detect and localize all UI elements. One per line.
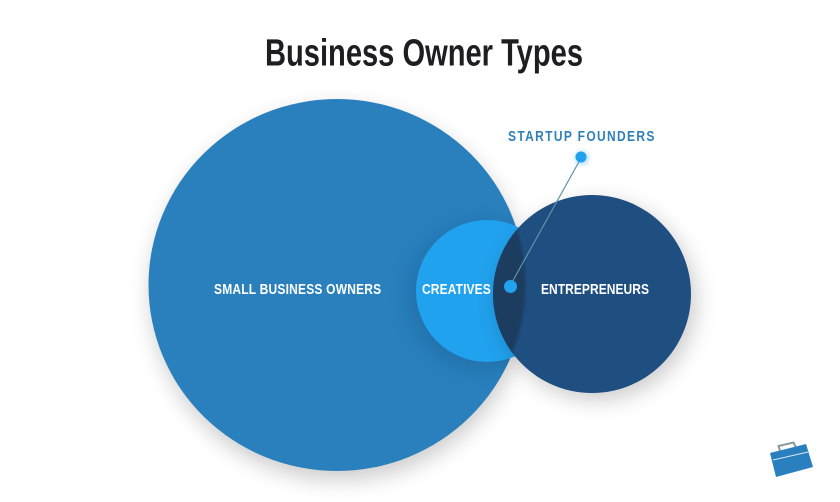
callout: startup founders pointer [504, 151, 589, 293]
label: startup founders: STARTUP FOUNDERS [508, 128, 654, 144]
icon: briefcase [770, 442, 813, 477]
label: creatives: CREATIVES [422, 281, 491, 297]
label: small business owners: SMALL BUSINESS OWNERS [214, 281, 381, 297]
title: Business Owner Types [265, 32, 583, 74]
circle: entrepreneurs [488, 192, 706, 410]
infographic canvas [142, 38, 813, 490]
circle: small business owners [148, 99, 527, 480]
label: entrepreneurs: ENTREPRENEURS [541, 281, 649, 297]
circle: creatives [408, 220, 519, 370]
